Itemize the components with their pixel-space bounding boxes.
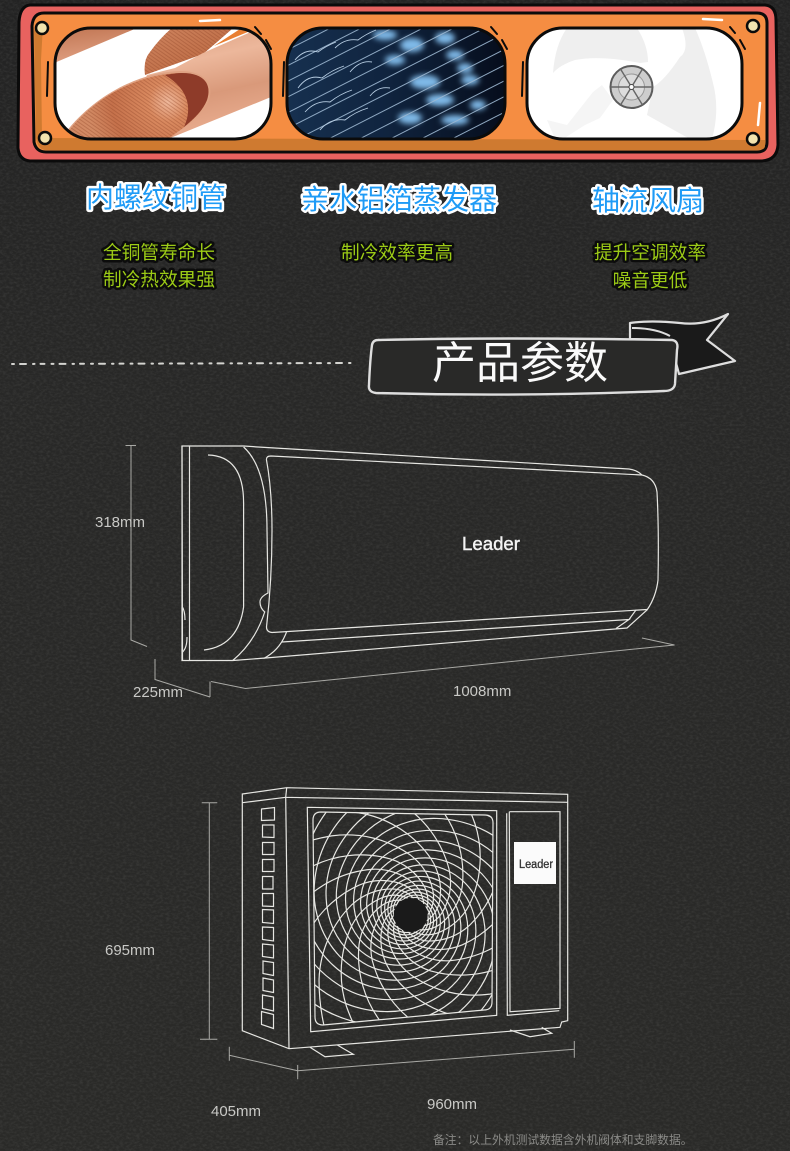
feature: hydrophilic aluminium evaporator (301, 184, 497, 263)
feature: axial fan (592, 185, 706, 291)
banner title: 产品参数 (432, 339, 608, 388)
banner box (369, 338, 677, 395)
depth dimension: 405mm (211, 1103, 261, 1120)
description (103, 242, 215, 290)
frame: board shadow strip (34, 25, 765, 150)
cabinet outline (242, 788, 568, 1057)
depth dimension: 225mm (133, 684, 183, 701)
indoor unit outline (182, 446, 658, 660)
description: 提升空调效率 (594, 242, 706, 263)
image window: inner-grooved copper tube (54, 27, 276, 141)
width dimension (298, 1041, 574, 1113)
spiral fan grille (312, 811, 494, 1026)
diagram: indoor unit (95, 446, 674, 701)
image window: hydrophilic aluminium evaporator (287, 28, 505, 139)
service panel logo (514, 842, 556, 884)
frame: orange inner board (32, 13, 767, 152)
image window: axial fan (527, 28, 742, 139)
width dimension (211, 638, 674, 700)
service panel (507, 812, 560, 1015)
ribbon tail (630, 314, 735, 374)
footnote: 备注：以上外机测试数据含外机阀体和支脚数据。 (433, 1133, 693, 1147)
ribbon fold (632, 328, 670, 336)
diagram: outdoor unit (106, 787, 575, 1116)
fan frame (307, 807, 497, 1032)
side vent slots (262, 808, 274, 1028)
depth dimension (211, 1047, 298, 1120)
height dimension (105, 803, 217, 1039)
panel: orange feature frame (18, 5, 778, 161)
description: 制冷热效果强 (103, 269, 215, 290)
feature: inner-grooved copper tube (86, 182, 226, 290)
width dimension: 1008mm (453, 683, 511, 700)
heading: 内螺纹铜管 (86, 182, 226, 213)
heading: 轴流风扇 (592, 185, 704, 216)
frame: highlight marks (200, 19, 760, 125)
height dimension: 318mm (95, 514, 145, 531)
description (594, 242, 706, 291)
frame: red outer border (18, 5, 778, 161)
description: 全铜管寿命长 (103, 242, 215, 263)
width dimension: 960mm (427, 1096, 477, 1113)
service panel logo: Leader (519, 859, 553, 871)
height dimension: 695mm (105, 942, 155, 959)
description: 制冷效率更高 (341, 242, 453, 263)
rivets (36, 20, 759, 145)
frame: ink ticks (47, 27, 745, 96)
heading: 亲水铝箔蒸发器 (301, 184, 497, 215)
depth dimension (133, 659, 210, 701)
dotted chalk line (12, 363, 355, 364)
section heading: product parameters banner (12, 314, 735, 395)
height dimension (95, 446, 147, 646)
description: 噪音更低 (613, 270, 688, 291)
brand logo: Leader (462, 534, 520, 554)
